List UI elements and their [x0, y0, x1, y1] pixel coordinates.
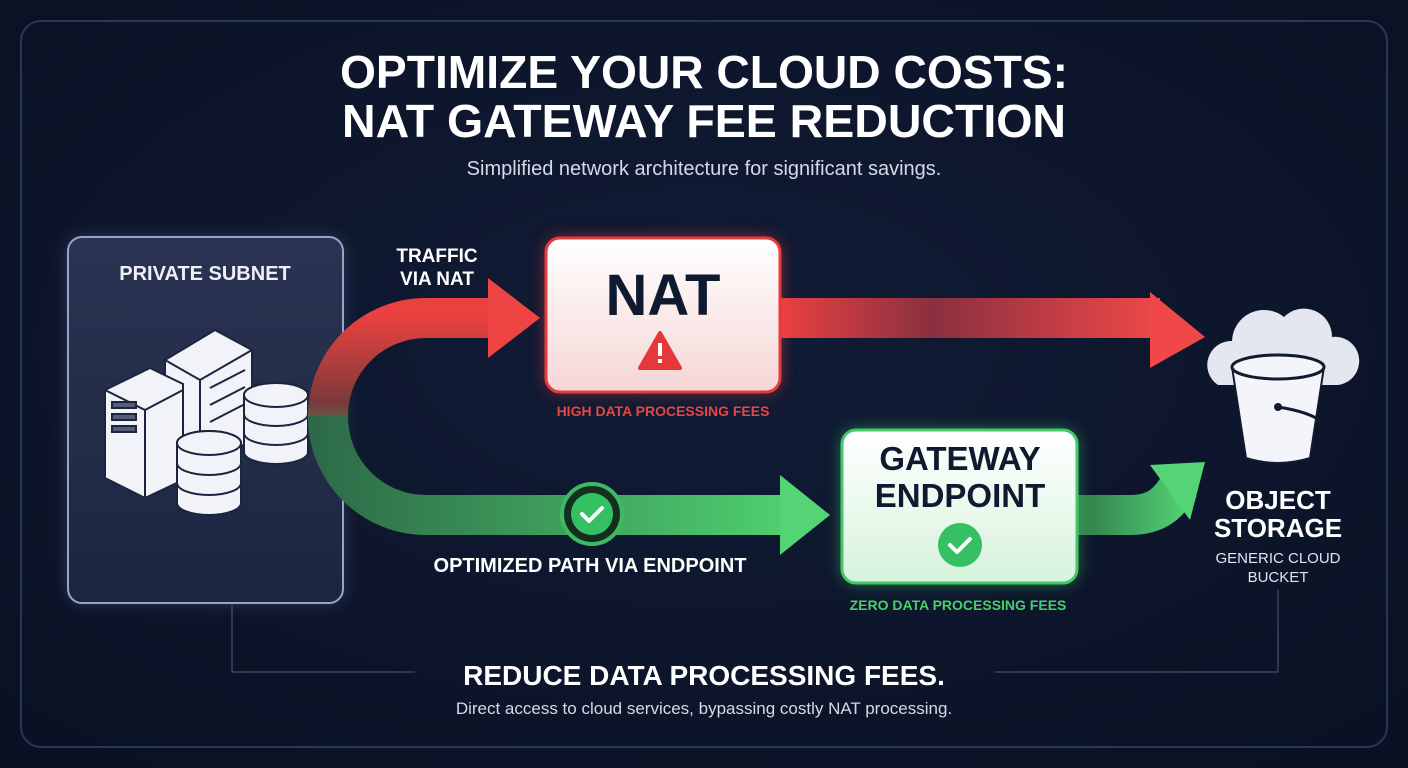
arrow: endpoint to storage [1075, 462, 1205, 520]
panel: private subnet [68, 237, 343, 603]
panel: gateway endpoint: ENDPOINT [875, 477, 1045, 514]
panel: NAT [546, 238, 780, 392]
icon: cloud bucket [1207, 309, 1359, 463]
arrow: NAT to storage [780, 292, 1205, 368]
label: optimized path: OPTIMIZED PATH VIA ENDPOINT [434, 555, 746, 577]
icon: check on optimized path [562, 484, 622, 544]
label: object storage: GENERIC CLOUD [1215, 550, 1341, 567]
subtitle: Simplified network architecture for significant savings. [467, 158, 941, 180]
arrow: red path to NAT [328, 278, 540, 420]
panel: gateway endpoint: GATEWAY [879, 440, 1041, 477]
label: object storage: BUCKET [1248, 569, 1308, 586]
footer text: Direct access to cloud services, bypassing costly NAT processing. [456, 699, 952, 718]
panel: NAT: NAT [606, 263, 720, 328]
label: traffic via NAT [396, 246, 478, 290]
arrow: green path to endpoint [328, 416, 830, 555]
title: NAT GATEWAY FEE REDUCTION [342, 95, 1066, 147]
label: object storage: OBJECT [1225, 485, 1331, 515]
label: high fees: HIGH DATA PROCESSING FEES [557, 403, 769, 419]
label: zero fees: ZERO DATA PROCESSING FEES [850, 597, 1066, 613]
footer heading: REDUCE DATA PROCESSING FEES. [463, 660, 945, 691]
panel: gateway endpoint [842, 430, 1077, 583]
icon: check [938, 523, 982, 567]
icon: warning [640, 333, 680, 368]
label: traffic via NAT: TRAFFIC [396, 246, 478, 267]
label: object storage [1214, 485, 1342, 586]
label: traffic via NAT: VIA NAT [400, 269, 474, 290]
icon: servers and databases [105, 330, 308, 515]
heading: private subnet: PRIVATE SUBNET [119, 263, 291, 285]
title: OPTIMIZE YOUR CLOUD COSTS: [340, 46, 1068, 98]
label: object storage: STORAGE [1214, 513, 1342, 543]
title [340, 46, 1068, 147]
bottom connector lines [232, 590, 1278, 672]
